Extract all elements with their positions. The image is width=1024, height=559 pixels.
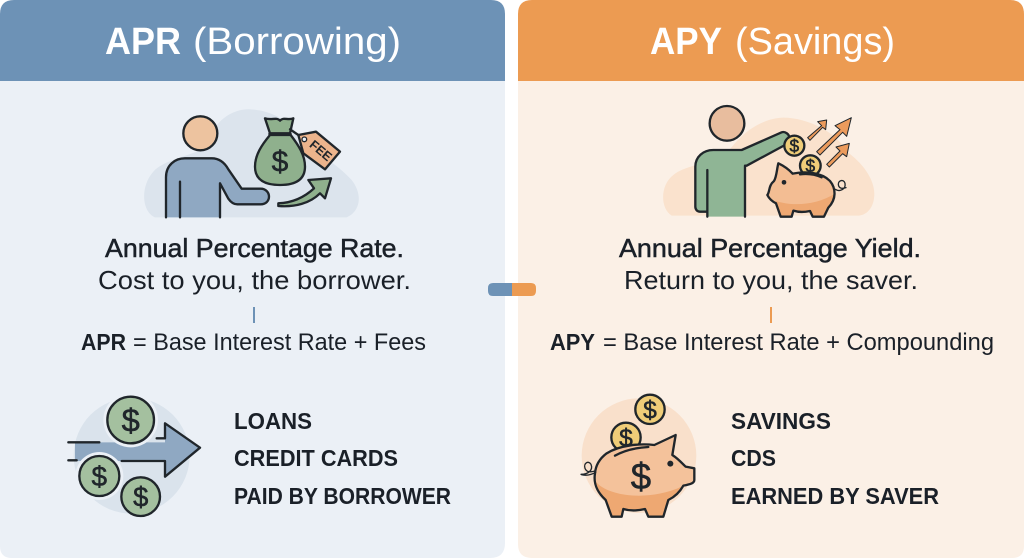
list: APY uses: EARNED BY SAVER xyxy=(731,483,939,509)
panel background: APY xyxy=(518,78,1024,558)
list: APR uses: PAID BY BORROWER xyxy=(234,483,451,509)
person xyxy=(695,132,789,217)
cloud backdrop xyxy=(663,118,874,216)
coin top xyxy=(635,395,665,424)
icon: piggy bank with coins: $ xyxy=(619,425,633,452)
fee tag xyxy=(290,129,298,135)
connector tick: APY xyxy=(770,307,772,323)
formula: APY: APY xyxy=(550,329,595,355)
formula: APY: = Base Interest Rate + Compounding xyxy=(603,329,994,356)
description: APR xyxy=(98,233,411,295)
description: APY xyxy=(619,233,921,295)
icon: person with piggy bank and growth arrows xyxy=(663,106,874,217)
piggy body: $ xyxy=(631,456,651,497)
icon: piggy bank with coins: $ xyxy=(643,397,657,424)
list: APR uses: LOANS xyxy=(234,408,312,434)
list: APY uses: CDS xyxy=(731,445,776,471)
heading: APR (Borrowing) xyxy=(105,21,401,63)
connector tick: APR xyxy=(253,307,255,323)
header band: APR xyxy=(0,0,505,81)
icon: person with piggy bank and growth arrows: $ xyxy=(790,136,800,156)
description: APY: Annual Percentage Yield. xyxy=(619,233,921,263)
heading: APR (Borrowing): APR xyxy=(105,21,181,63)
icon: coins and arrow: $ xyxy=(122,402,140,439)
heading: APR (Borrowing): (Borrowing) xyxy=(193,21,401,63)
circle backdrop xyxy=(582,398,696,513)
icon: person with money bag and fee tag: $ xyxy=(272,146,289,179)
piggy bank xyxy=(767,163,846,217)
description: APY: Return to you, the saver. xyxy=(624,265,918,295)
coin top xyxy=(103,393,158,447)
list: APR uses xyxy=(234,408,451,509)
center connector pill xyxy=(488,283,536,296)
money bag xyxy=(255,135,305,185)
list: APY uses: SAVINGS xyxy=(731,408,831,434)
panel background: APR xyxy=(0,78,505,558)
formula: APR: APR xyxy=(81,329,126,355)
green arrow xyxy=(278,178,331,206)
arrow xyxy=(75,423,200,477)
circle backdrop xyxy=(74,398,190,514)
coin bottom xyxy=(121,477,160,516)
icon: coins and arrow: $ xyxy=(92,461,108,492)
icon: person with money bag and fee tag: FEE xyxy=(307,138,335,164)
icon: coins and arrow xyxy=(68,393,200,516)
icon: person with piggy bank and growth arrows: $ xyxy=(806,156,816,176)
heading: APY (Savings) xyxy=(650,21,895,63)
description: APR: Cost to you, the borrower. xyxy=(98,265,411,295)
header band: APY xyxy=(518,0,1024,81)
formula: APR: = Base Interest Rate + Fees xyxy=(133,329,426,356)
icon: piggy bank with coins xyxy=(581,395,696,517)
coin dropping xyxy=(800,155,821,176)
heading: APY (Savings): (Savings) xyxy=(735,21,895,63)
list: APY uses xyxy=(731,408,939,509)
icon: coins and arrow: $ xyxy=(133,481,148,512)
list: APR uses: CREDIT CARDS xyxy=(234,445,398,471)
cloud backdrop xyxy=(144,109,359,217)
coin lower xyxy=(611,423,641,452)
panel: APY savings xyxy=(518,0,1024,558)
heading: APY (Savings): APY xyxy=(650,21,722,63)
panel: APR borrowing xyxy=(0,0,505,558)
coin left xyxy=(75,452,123,500)
coin in hand xyxy=(784,136,804,156)
description: APR: Annual Percentage Rate. xyxy=(105,233,404,263)
person xyxy=(166,158,269,217)
icon: person with money bag and fee tag xyxy=(144,109,359,217)
growth arrows xyxy=(808,118,851,167)
